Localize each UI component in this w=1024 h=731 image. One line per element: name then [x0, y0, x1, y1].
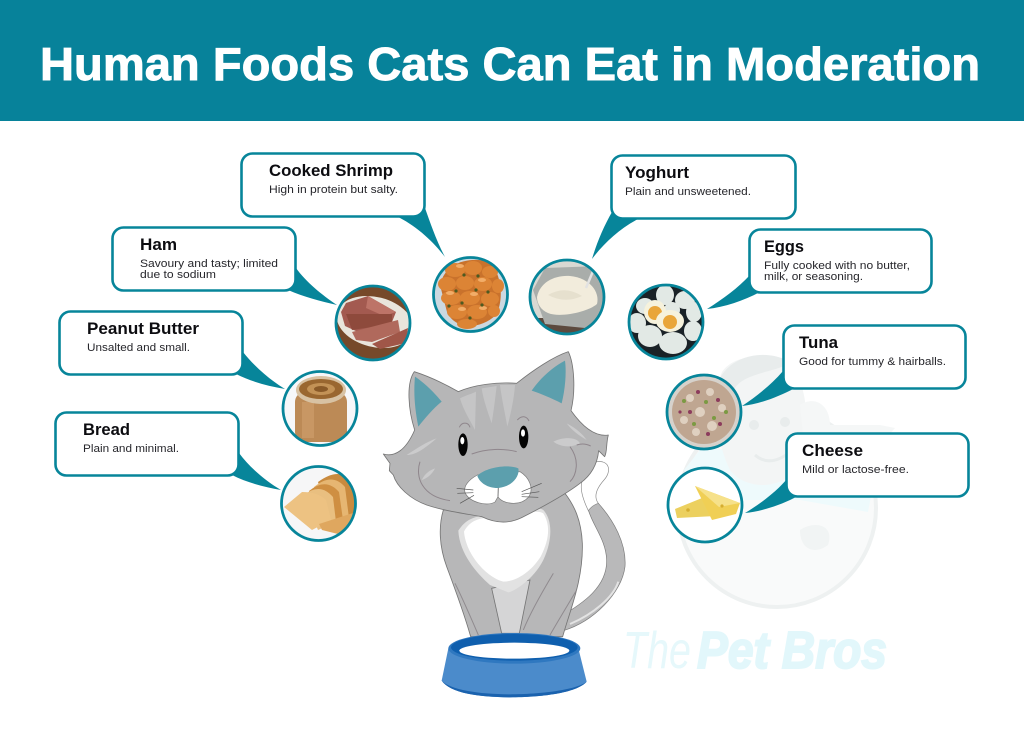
callout: cheese	[745, 434, 968, 513]
food: cheese	[668, 468, 742, 542]
face lines	[418, 417, 591, 501]
title: Human Foods Cats Can Eat in Moderation	[40, 38, 980, 90]
heading: cooked shrimp: Cooked Shrimp	[269, 161, 393, 180]
food: eggs	[627, 283, 705, 361]
food: tuna	[665, 373, 743, 451]
cat eyes	[458, 433, 468, 456]
cat ears inner	[414, 377, 442, 427]
callout: ham	[112, 228, 337, 305]
description: peanut butter: Unsalted and small.	[87, 342, 190, 354]
callout: eggs	[707, 230, 932, 309]
description: eggs: Fully cooked with no butter,	[764, 260, 910, 272]
watermark logo text: Pet Bros	[697, 622, 887, 680]
illustration: cat with bowl	[383, 352, 625, 697]
callout: bread	[56, 412, 281, 490]
description: yoghurt: Plain and unsweetened.	[625, 186, 751, 198]
description: bread: Plain and minimal.	[83, 443, 179, 455]
heading: ham: Ham	[140, 235, 177, 254]
watermark: The Pet Bros mascot and logo	[623, 355, 895, 680]
callout: tuna	[742, 326, 966, 406]
callout: ham: due to sodium	[140, 269, 216, 281]
description: cheese: Mild or lactose-free.	[802, 464, 909, 476]
cat nose	[477, 466, 519, 488]
callout: eggs: milk, or seasoning.	[764, 271, 863, 283]
heading: bread: Bread	[83, 420, 130, 439]
cat tail	[560, 462, 625, 631]
description: ham: Savoury and tasty; limited	[140, 258, 278, 270]
heading: cheese: Cheese	[802, 441, 863, 460]
head stripes	[460, 385, 515, 430]
callout: peanut butter	[60, 312, 285, 389]
watermark logo text: The	[623, 622, 691, 680]
food: bread	[280, 465, 358, 543]
food: cooked shrimp	[430, 255, 512, 335]
food: yoghurt	[528, 258, 606, 338]
description: tuna: Good for tummy & hairballs.	[799, 356, 946, 368]
heading: yoghurt: Yoghurt	[625, 163, 689, 182]
cat muzzle	[465, 472, 531, 504]
cat bowl	[442, 633, 587, 697]
callout: yoghurt	[592, 156, 796, 259]
description: cooked shrimp: High in protein but salty.	[269, 184, 398, 196]
header banner	[0, 0, 1024, 121]
whiskers	[457, 483, 542, 503]
callout: cooked shrimp	[242, 154, 445, 257]
heading: tuna: Tuna	[799, 333, 839, 352]
cat body	[440, 493, 582, 637]
watermark logo text	[623, 622, 887, 680]
food: ham	[334, 284, 412, 362]
heading: peanut butter: Peanut Butter	[87, 319, 199, 338]
cat head	[383, 352, 608, 522]
heading: eggs: Eggs	[764, 237, 804, 256]
food: peanut butter	[281, 370, 359, 448]
